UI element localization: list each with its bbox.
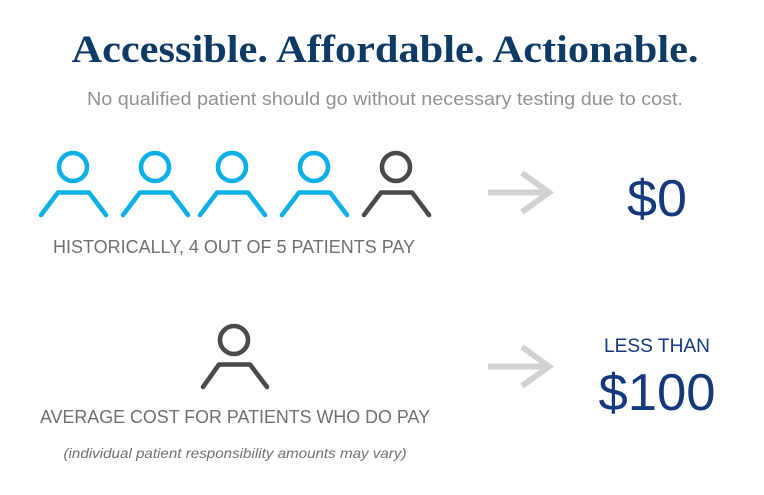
value: $0: $0 — [627, 170, 687, 228]
icon: blue person 2 — [123, 153, 188, 215]
arrow: top — [488, 173, 549, 212]
subtitle: No qualified patient should go without necessary testing due to cost. — [87, 89, 683, 109]
note: individual amounts: (individual patient responsibility amounts may vary) — [64, 445, 406, 461]
value: $100: $100 — [598, 364, 716, 422]
icon: blue person 1 — [41, 153, 106, 215]
icon: blue person 3 — [200, 153, 265, 215]
title: Accessible. Affordable. Actionable. — [72, 28, 698, 71]
icon: blue person 4 — [282, 153, 347, 215]
label: average cost: AVERAGE COST FOR PATIENTS WHO DO PAY — [40, 407, 430, 427]
arrow: bottom — [488, 347, 549, 386]
icon: dark person 5 — [364, 153, 429, 215]
label: historically: HISTORICALLY, 4 OUT OF 5 PATIENTS PAY — [53, 237, 415, 257]
label: less than: LESS THAN — [604, 336, 710, 357]
icon: dark person single — [203, 326, 267, 387]
